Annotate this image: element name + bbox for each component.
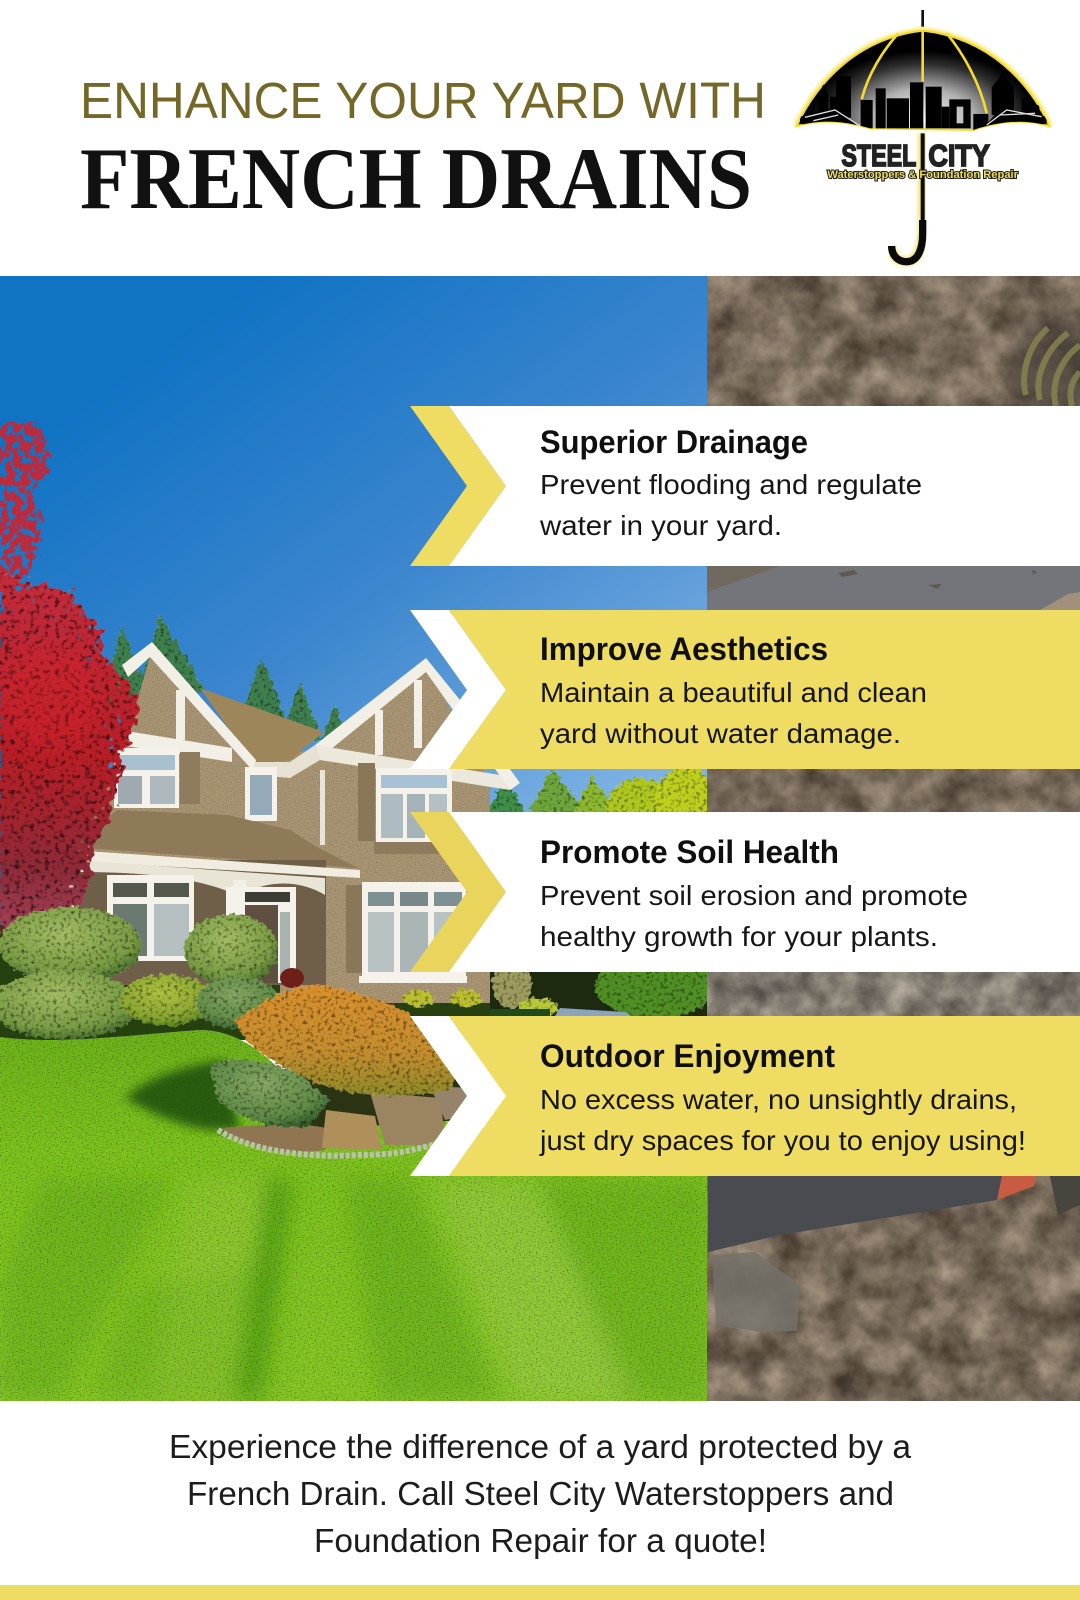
shade under orange shrub	[290, 1060, 470, 1130]
icon: city skyline	[800, 73, 1047, 130]
chevron	[410, 812, 506, 972]
icon: umbrella handle shaft	[917, 133, 929, 220]
green shrub on rocks	[210, 1059, 330, 1128]
footer line 1: Experience the difference of a yard protected by a	[169, 1428, 912, 1465]
upper right shutter	[358, 763, 375, 841]
heading: Superior Drainage	[540, 424, 808, 460]
panel: promote soil health	[410, 812, 1080, 972]
logo name second word: CITY	[928, 139, 990, 173]
yellow shrubs	[402, 989, 482, 1007]
banner	[449, 812, 1080, 972]
body line 2: water in your yard.	[539, 510, 782, 541]
soil section middle	[707, 769, 1080, 812]
logo name: STEEL	[841, 139, 916, 173]
heading: Promote Soil Health	[540, 834, 839, 870]
icon: umbrella handle hook	[892, 220, 923, 262]
footer stripe	[0, 1585, 1080, 1600]
flower pot	[280, 968, 304, 988]
eave right	[315, 745, 510, 790]
upper center window	[245, 767, 277, 821]
footer line 3: Foundation Repair for a quote!	[314, 1522, 767, 1559]
panel: outdoor enjoyment	[410, 1016, 1080, 1176]
lower left window	[107, 875, 194, 961]
garden path	[555, 1008, 632, 1016]
upper right window	[376, 768, 452, 842]
right gable trim	[315, 658, 520, 790]
body line 2: just dry spaces for you to enjoy using!	[539, 1125, 1026, 1156]
low hedge right	[196, 977, 280, 1029]
porch shade wall	[70, 860, 326, 985]
body line 2: healthy growth for your plants.	[540, 921, 938, 952]
panel: soil photo strip	[707, 276, 1080, 1401]
window sill	[374, 842, 444, 854]
body line 1: Prevent flooding and regulate	[540, 469, 922, 500]
title	[80, 72, 766, 228]
logo: Steel City umbrella	[797, 10, 1049, 262]
concrete specks	[838, 570, 1037, 589]
icon: umbrella handle glow	[892, 133, 923, 262]
banner	[449, 1016, 1080, 1176]
chevron	[410, 610, 506, 769]
dark gap at pipe end	[1050, 1176, 1080, 1215]
concrete soil corner right	[1040, 592, 1080, 610]
icon: umbrella spike	[921, 10, 924, 27]
garden foliage	[490, 972, 707, 1016]
lawn shadow	[125, 1060, 240, 1130]
main roof	[200, 688, 324, 765]
panel: superior drainage	[410, 406, 1080, 566]
upper left shutter	[180, 752, 200, 804]
heading: Improve Aesthetics	[540, 631, 828, 667]
garden fence and dark foliage	[490, 972, 707, 1016]
black pipe	[708, 1176, 1002, 1252]
left gable trim	[122, 642, 256, 772]
icon: umbrella ribs	[862, 31, 987, 113]
body line 1: Prevent soil erosion and promote	[540, 880, 968, 911]
sky	[0, 276, 707, 925]
rock border	[222, 1086, 470, 1152]
soil section top	[707, 276, 1080, 406]
icon: umbrella glow rim	[797, 31, 1049, 126]
porch fascia	[77, 850, 360, 878]
glassy rock	[712, 1252, 800, 1332]
eave center	[254, 745, 320, 778]
corrugated pipe	[1024, 328, 1080, 406]
shrub backdrop	[0, 925, 490, 1040]
banner	[449, 610, 1080, 769]
concrete soil corner left	[707, 566, 780, 592]
logo tagline: Waterstoppers & Foundation Repair	[827, 169, 1019, 181]
low hedge middle	[121, 974, 213, 1026]
icon: umbrella canopy	[797, 31, 1049, 130]
front door	[226, 887, 296, 983]
shrub left large	[0, 907, 142, 983]
lower right window	[359, 882, 467, 983]
right gable posts	[375, 680, 422, 755]
garden hedge strip	[490, 1009, 550, 1016]
porch roof	[72, 810, 358, 868]
soil section bottom	[707, 1176, 1080, 1401]
chevron	[410, 1016, 506, 1176]
red maple tree dense backing	[0, 610, 105, 935]
red maple tree upper sprays	[0, 422, 50, 590]
footer line 2: French Drain. Call Steel City Waterstoppers and	[187, 1475, 894, 1512]
red pipe end	[997, 1176, 1036, 1200]
maple highlight cluster	[0, 650, 100, 750]
shrub by door	[184, 914, 278, 986]
background trees behind roof	[100, 615, 350, 745]
lower right shutter	[346, 885, 362, 973]
panel: improve aesthetics	[410, 610, 1080, 769]
porch beam	[75, 860, 325, 895]
red maple tree crown	[0, 572, 142, 945]
background trees right of house	[490, 769, 707, 812]
orange shrub	[235, 985, 462, 1095]
concrete section	[707, 566, 1080, 610]
title line: enhance your yard with: ENHANCE YOUR YARD WITH	[80, 72, 766, 129]
footer call to action	[169, 1428, 912, 1559]
house walls	[70, 650, 490, 1003]
low hedge left	[0, 971, 138, 1039]
title line: french drains: FRENCH DRAINS	[80, 131, 752, 228]
heading: Outdoor Enjoyment	[540, 1038, 835, 1074]
gable post left	[176, 690, 185, 740]
banner	[449, 406, 1080, 566]
downspout	[320, 770, 325, 845]
porch columns	[62, 880, 246, 908]
panel: house photo	[0, 276, 717, 1405]
lawn	[0, 1020, 710, 1405]
chevron	[410, 406, 506, 566]
pebble edge	[218, 1130, 440, 1156]
body line 2: yard without water damage.	[540, 718, 901, 749]
body line 1: Maintain a beautiful and clean	[540, 677, 927, 708]
eave left	[120, 730, 232, 762]
soil section lower	[707, 972, 1080, 1016]
pipe shadow	[1010, 320, 1080, 420]
body line 1: No excess water, no unsightly drains,	[540, 1084, 1017, 1115]
upper left window	[114, 748, 179, 808]
